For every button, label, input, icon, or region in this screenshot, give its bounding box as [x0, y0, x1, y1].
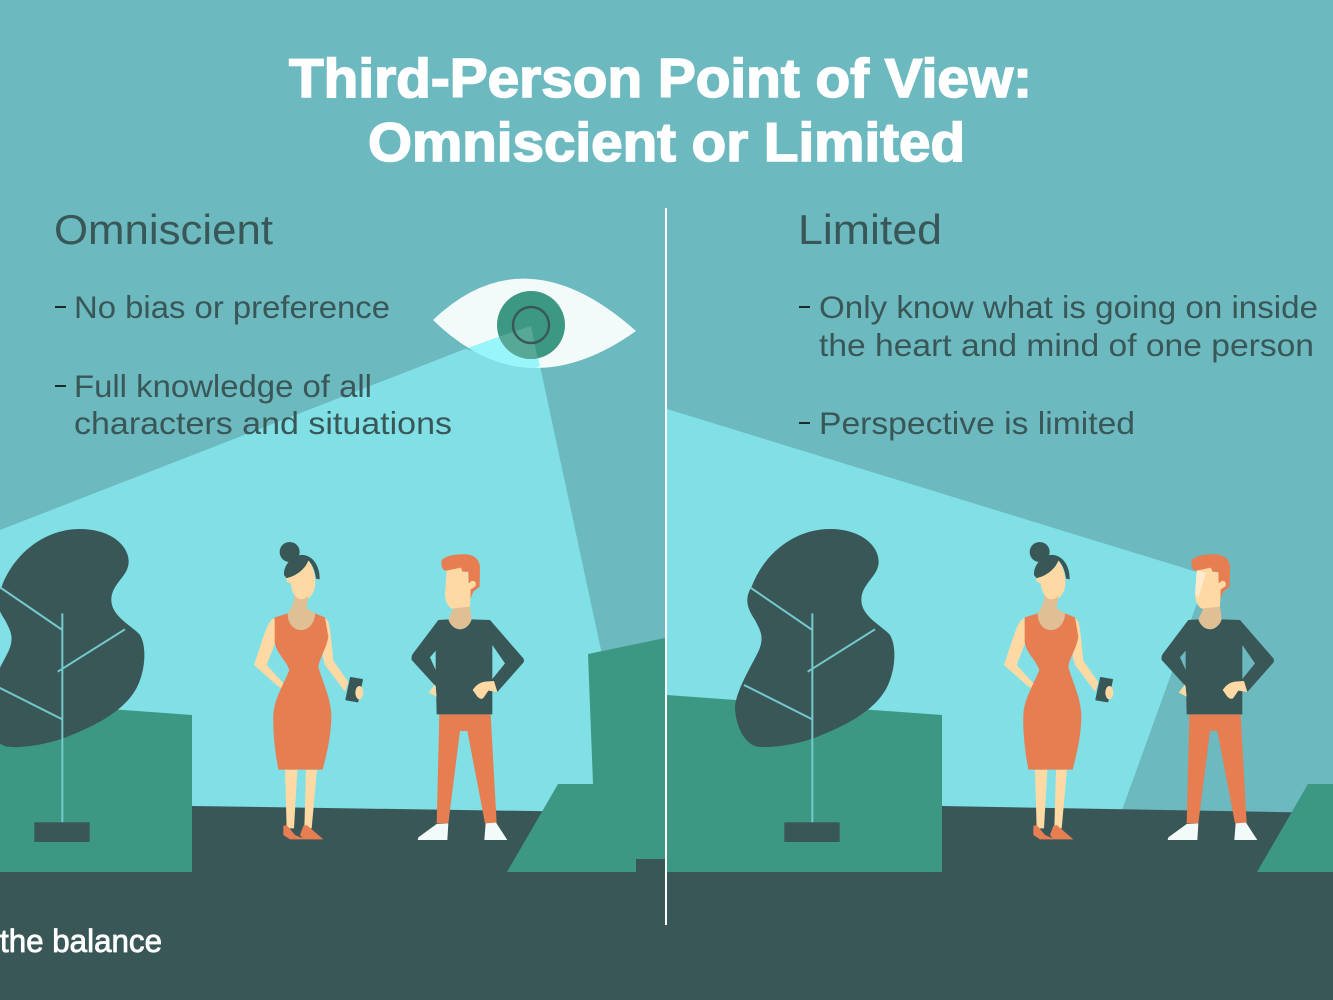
green block: right panel left: [667, 695, 942, 872]
text block: limited bullets: [799, 289, 1318, 441]
ground: [0, 804, 1333, 1000]
green block: right panel right: [1257, 784, 1333, 872]
text block: limited bullets: Perspective is limited: [819, 405, 1135, 441]
text block: omniscient bullets: [55, 289, 452, 441]
tree: right panel: [735, 529, 894, 842]
tree: left panel: [0, 529, 144, 842]
text block: omniscient bullets: No bias or preference: [74, 289, 390, 325]
divider: [665, 208, 667, 925]
man: right panel: [1161, 554, 1274, 840]
green block: left panel left: [0, 695, 192, 872]
man: left panel: [411, 554, 524, 840]
heading: Limited: Limited: [798, 206, 942, 253]
title: Omniscient or Limited: [368, 111, 965, 173]
title: Third-Person Point of View:: [289, 47, 1032, 109]
icon: eye: [433, 278, 636, 368]
text block: omniscient bullets: Full knowledge of all: [74, 368, 372, 404]
light beam: omniscient eye: [0, 349, 601, 815]
light beam: limited view: [667, 409, 1197, 810]
green block: left panel right: [507, 638, 665, 872]
woman: right panel: [1004, 542, 1113, 839]
text block: omniscient bullets: characters and situations: [74, 405, 452, 441]
woman: left panel: [254, 542, 363, 839]
heading: Omniscient: Omniscient: [54, 206, 273, 253]
title: [289, 47, 1032, 173]
text block: limited bullets: Only know what is going on inside: [819, 289, 1318, 325]
logo: the balance: the balance: [0, 923, 162, 959]
text block: limited bullets: the heart and mind of one person: [819, 327, 1314, 363]
